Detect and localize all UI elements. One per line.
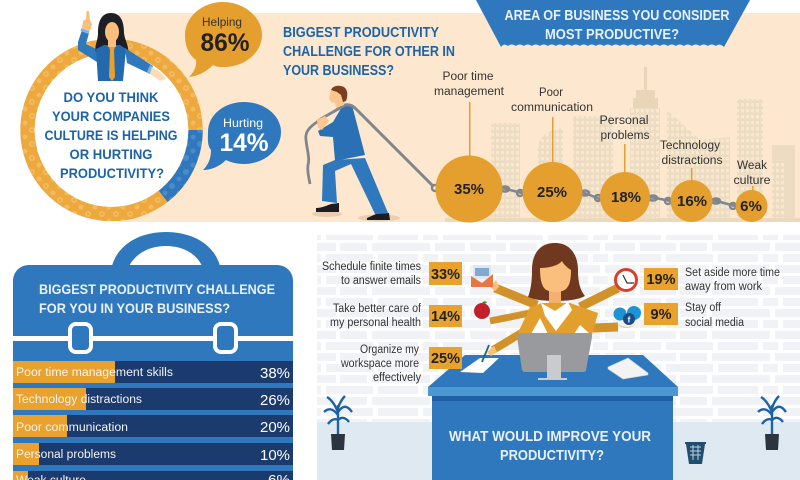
icon: apple xyxy=(474,301,490,319)
icon: social media xyxy=(614,306,641,328)
stat: social media 9%: social media xyxy=(685,317,745,329)
chart: 16% technology distractions xyxy=(660,140,723,222)
icon: paper stack xyxy=(608,358,648,379)
banner: area of business: AREA OF BUSINESS YOU CONSIDER xyxy=(504,8,730,24)
stat: schedule emails 33% xyxy=(322,261,462,287)
callout: helping 86%: 86% xyxy=(200,29,250,57)
bar: personal problems 10%: 10% xyxy=(260,448,290,464)
panel: office wall xyxy=(317,235,800,422)
panel: office floor xyxy=(317,422,800,480)
icon: clock xyxy=(616,270,636,290)
stat: personal health 14% xyxy=(330,303,462,329)
icon: man pulling chain xyxy=(306,86,433,222)
panel: briefcase challenge for you: FOR YOU IN YOUR BUSINESS? xyxy=(39,300,230,316)
icon: right plant xyxy=(758,396,786,450)
chart: 35% poor time management: management xyxy=(434,86,505,98)
chart: 25% poor communication: communication xyxy=(511,102,593,114)
callout: helping 86%: Helping xyxy=(202,15,242,29)
chart: 18% personal problems: problems xyxy=(600,130,650,142)
text: culture question: YOUR COMPANIES xyxy=(52,108,170,124)
chart: 6% weak culture: culture xyxy=(734,175,770,187)
heading: challenge for others: BIGGEST PRODUCTIVITY xyxy=(283,25,439,41)
panel: briefcase challenge for you: BIGGEST PRODUCTIVITY CHALLENGE xyxy=(39,281,275,297)
callout: hurting 14%: 14% xyxy=(220,129,268,157)
chart: 18% personal problems: Personal xyxy=(600,115,648,127)
text: culture question: CULTURE IS HELPING xyxy=(44,127,178,143)
bar: poor time management skills 38%: Poor time management skills xyxy=(16,367,173,379)
chart: 18% personal problems: 18% xyxy=(611,189,641,206)
icon: left plant xyxy=(324,396,352,450)
heading: challenge for others: YOUR BUSINESS? xyxy=(283,63,394,79)
banner: area of business xyxy=(476,0,750,47)
callout: hurting 14% xyxy=(203,102,281,170)
bar: poor communication 20%: 20% xyxy=(260,420,290,436)
chart: helping vs hurting donut xyxy=(28,46,196,214)
text: what would improve: WHAT WOULD IMPROVE YOUR xyxy=(449,429,651,445)
chart: 16% technology distractions: 16% xyxy=(677,193,707,210)
stat: schedule emails 33%: 33% xyxy=(431,266,460,283)
bar: poor communication 20%: Poor communication xyxy=(16,422,128,434)
text: what would improve xyxy=(449,429,651,464)
text: culture question: DO YOU THINK xyxy=(64,89,158,105)
bar: poor time management skills 38%: 38% xyxy=(260,366,290,382)
stat: social media 9%: Stay off xyxy=(685,302,722,314)
bar: personal problems 10% xyxy=(13,443,293,465)
bar: technology distractions 26%: 26% xyxy=(260,393,290,409)
stat: social media 9% xyxy=(644,302,745,329)
stat: personal health 14%: my personal health xyxy=(330,317,421,329)
chart: 25% poor communication: 25% xyxy=(537,184,567,201)
icon: woman pointing up xyxy=(78,11,166,81)
callout: hurting 14%: Hurting xyxy=(223,116,263,130)
bar: technology distractions 26% xyxy=(13,388,293,410)
chart: 35% poor time management: 35% xyxy=(454,181,484,198)
stat: social media 9%: 9% xyxy=(650,306,672,323)
heading: challenge for others: CHALLENGE FOR OTHER IN xyxy=(283,44,455,60)
stat: time away 19%: Set aside more time xyxy=(685,267,780,279)
chart: 35% poor time management: Poor time xyxy=(442,71,494,83)
illustration: multitasking woman xyxy=(487,243,618,380)
bar: personal problems 10%: Personal problems xyxy=(16,449,116,461)
bar: technology distractions 26%: Technology distractions xyxy=(16,394,142,406)
stat: organize workspace 25%: effectively xyxy=(373,372,421,384)
chain links between circles xyxy=(432,185,736,209)
icon: paper and pen xyxy=(460,345,499,373)
text: culture question: OR HURTING xyxy=(70,146,153,162)
stat: time away 19%: away from work xyxy=(685,281,762,293)
heading: challenge for others xyxy=(283,25,455,79)
stat: organize workspace 25% xyxy=(340,344,462,384)
stat: organize workspace 25%: 25% xyxy=(431,350,460,367)
chart: 6% weak culture: 6% xyxy=(740,198,762,215)
stat: time away 19% xyxy=(644,267,780,293)
chart: 6% weak culture: Weak xyxy=(737,160,767,172)
bar: poor communication 20% xyxy=(13,415,293,437)
chart: 16% technology distractions: Technology xyxy=(660,140,720,152)
chart: 25% poor communication xyxy=(511,87,593,222)
text: culture question xyxy=(44,89,178,181)
stat: schedule emails 33%: Schedule finite times xyxy=(322,261,421,273)
stat: personal health 14%: 14% xyxy=(431,308,460,325)
bar: weak culture 6% xyxy=(13,471,293,480)
stat: personal health 14%: Take better care of xyxy=(333,303,422,315)
illustration: desk xyxy=(428,355,678,480)
chart: 6% weak culture xyxy=(734,160,770,222)
chart: 25% poor communication: Poor xyxy=(539,87,563,99)
text: culture question: PRODUCTIVITY? xyxy=(60,165,164,181)
skyline illustration xyxy=(445,67,800,222)
icon: email xyxy=(471,265,493,287)
icon: trash bin xyxy=(685,442,706,464)
text: what would improve: PRODUCTIVITY? xyxy=(500,448,604,464)
stat: schedule emails 33%: to answer emails xyxy=(341,275,421,287)
icon: social media: f xyxy=(628,316,631,324)
chart: 16% technology distractions: distractions xyxy=(662,155,723,167)
chart: 35% poor time management xyxy=(434,71,505,222)
stat: time away 19%: 19% xyxy=(646,271,676,288)
panel: culture and colleagues background xyxy=(118,13,800,222)
bar: poor time management skills 38% xyxy=(13,361,293,383)
banner: area of business: MOST PRODUCTIVE? xyxy=(545,27,679,43)
stat: organize workspace 25%: workspace more xyxy=(340,358,419,370)
callout: helping 86% xyxy=(185,2,262,77)
stat: organize workspace 25%: Organize my xyxy=(360,344,419,356)
chart: 18% personal problems xyxy=(600,115,650,222)
panel: briefcase challenge for you xyxy=(13,232,293,480)
